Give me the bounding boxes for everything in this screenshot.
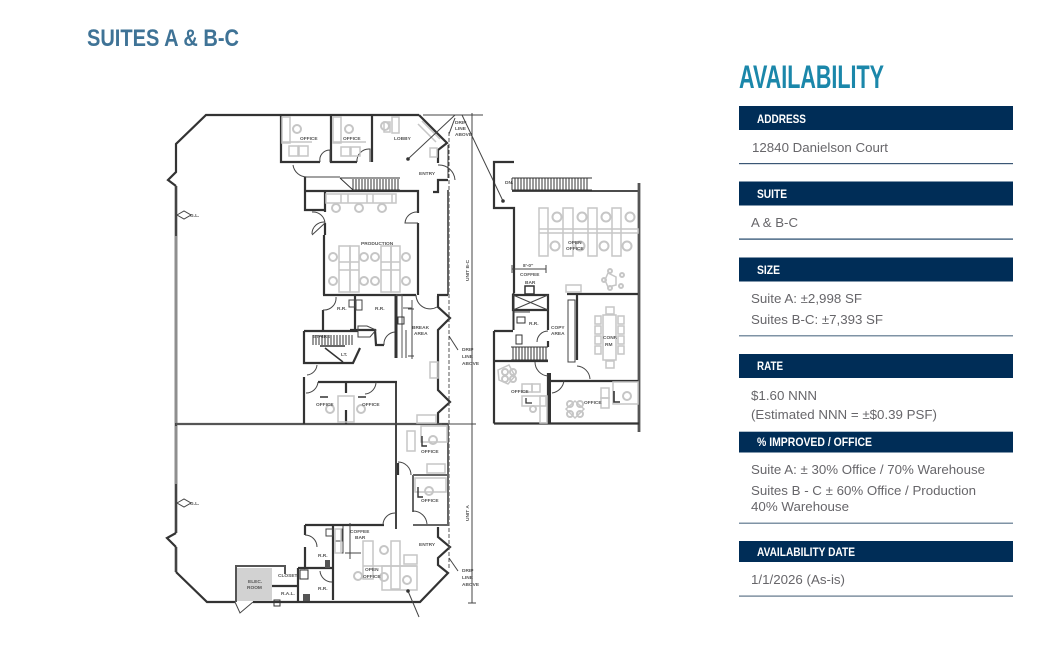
room labels: upper level: DN. [505,180,513,186]
furniture: conference table [595,307,624,368]
panel: rate: RATE [757,359,783,373]
room labels: main level: R.R. [318,586,328,592]
panel: size: SIZE [757,263,780,277]
room labels: main level: R.R. [375,306,385,312]
panel: percent improved: Suites B - C ± 60% Office / Production [751,483,976,498]
room labels: main level: OFFICE [421,498,439,504]
drip line callouts: ABOVE [462,361,480,367]
panel: percent improved [739,432,1013,524]
drip line callouts: LINE [455,126,467,132]
room labels: upper level: OFFICE [584,400,602,406]
room labels: main level: BREAK [412,325,430,331]
upper level stairs [511,178,592,360]
furniture: lower offices [320,362,447,497]
room labels: main level: OFFICE [343,136,361,142]
furniture: open office cubicles [539,208,638,292]
room labels: upper level: OFFICE [566,246,584,252]
room labels: main level: G.L. [190,213,199,219]
room labels: main level: CLOSET [278,573,298,579]
upper level walls [494,162,639,432]
room labels: main level: LT. [341,352,347,358]
drip line callouts: ABOVE [462,582,480,588]
room labels: main level: ENTRY [419,171,436,177]
room labels: main level: BAR [355,535,366,541]
panel: rate: (Estimated NNN = ±$0.39 PSF) [751,407,937,422]
room labels: main level: OFFICE [300,136,318,142]
panel: availability date: 1/1/2026 (As-is) [751,572,845,587]
dimension line with unit labels [423,113,483,603]
panel: size [739,258,1013,336]
drip line callouts: DRIP [462,568,474,574]
room labels: upper level: RM [605,342,612,348]
lower offices walls [304,377,448,525]
suite divider and demising walls [176,382,448,529]
room labels: upper level: OPEN [568,240,582,246]
room labels: main level: ENTRY [419,542,436,548]
furniture: production benches [326,194,410,292]
dimension line with unit labels: UNIT A [465,505,471,521]
drip line callouts: DRIP [455,120,467,126]
room labels: main level: OPEN [365,567,379,573]
room labels: main level: R.R. [318,553,328,559]
room labels: upper level: R.R. [529,321,539,327]
room labels: main level: OFFICE [316,402,334,408]
restrooms and break area walls [307,295,414,375]
panel: size: Suite A: ±2,998 SF [751,291,862,306]
room labels: upper level: COPY [551,325,565,331]
panel: suite [739,182,1013,240]
panel: percent improved: Suite A: ± 30% Office / 70% Warehouse [751,462,985,477]
panel: rate: $1.60 NNN [751,388,817,403]
room labels: main level: OFFICE [362,402,380,408]
panel: address: 12840 Danielson Court [752,140,888,155]
room labels: upper level: 8'-0" [523,263,533,269]
room labels: main level: ROOM [247,585,262,591]
room labels: upper level: COFFEE [520,272,540,278]
panel: percent improved: % IMPROVED / OFFICE [757,435,872,449]
room labels: main level: LOBBY [394,136,412,142]
stairs [304,178,400,363]
panel: rate [739,354,1013,422]
dimension line with unit labels: UNIT B-C [465,259,471,281]
upper level fixtures [512,265,546,344]
panel: suite: SUITE [757,187,787,201]
room labels: upper level: BAR [525,280,536,286]
title: Suites A & B-C: SUITES A & B-C [87,25,239,52]
room labels: main level: R.A.L. [281,591,295,597]
room labels: upper level: OFFICE [511,389,529,395]
heading: availability: AVAILABILITY [739,59,884,95]
panel: availability date [739,541,1013,597]
key lines between plans [406,115,505,617]
room labels: main level: R.R. [337,306,347,312]
room labels: main level: OFFICE [363,574,381,580]
room labels: main level: COFFEE [350,529,370,535]
drip line callouts: ABOVE [455,132,473,138]
drip line callouts: LINE [462,354,474,360]
room labels: main level: AREA [414,331,428,337]
grade level door markers [177,211,191,507]
top offices and lobby walls [281,115,437,309]
panel: percent improved: 40% Warehouse [751,499,849,514]
room labels: main level: PRODUCTION [361,241,394,247]
room labels: upper level: AREA [551,331,565,337]
outer building walls [167,115,455,613]
panel: size: Suites B-C: ±7,393 SF [751,312,883,327]
drip line callouts: LINE [462,575,474,581]
room labels: main level: ELEC. [248,579,262,585]
room labels: main level: G.L. [190,501,199,507]
furniture: suite A open office [335,529,417,590]
panel: suite: A & B-C [751,215,798,230]
floor plan: upper level [494,162,639,432]
room labels: main level [190,136,439,597]
suite A core walls [236,513,395,606]
drip line callouts: DRIP [462,347,474,353]
room labels: main level: STAIRS [313,334,331,340]
panel: address [739,106,1013,164]
panel: availability date: AVAILABILITY DATE [757,545,855,559]
furniture: upper offices [498,365,638,423]
drip line callouts [449,118,480,588]
furniture: top offices and lobby [282,117,440,157]
floor plan: main level [167,113,505,617]
room labels: main level: OFFICE [421,449,439,455]
panel: address: ADDRESS [757,112,806,126]
room labels: upper level: CONF. [603,335,617,341]
room labels: upper level [505,180,617,406]
